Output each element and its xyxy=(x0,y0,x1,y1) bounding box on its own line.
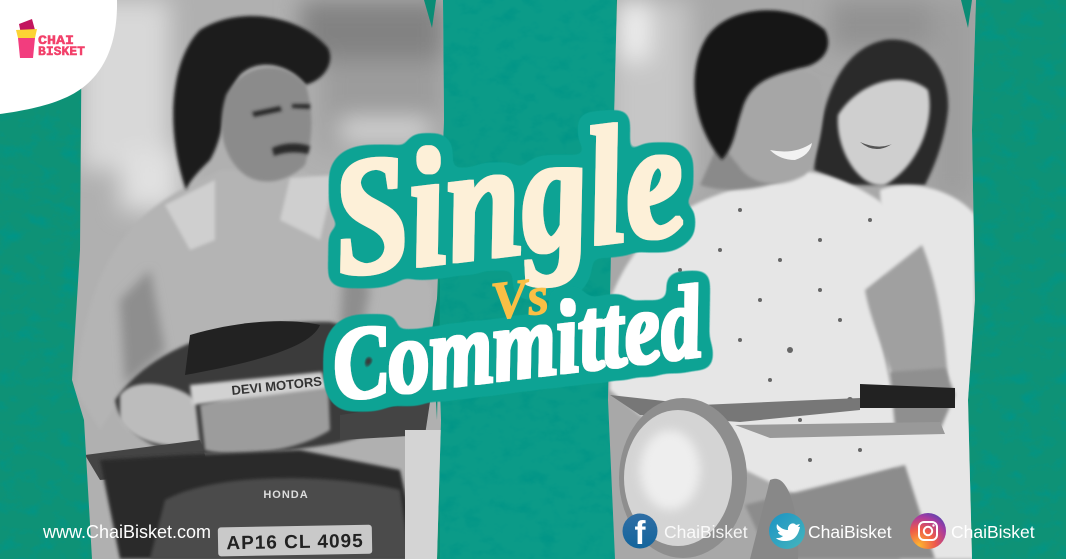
photo: single man on scooter xyxy=(70,0,445,559)
icon: twitter bird xyxy=(769,513,805,549)
title: Vs: Vs xyxy=(488,265,552,331)
footer social: instagram xyxy=(910,513,1035,549)
logo corner: white blob xyxy=(0,0,117,114)
footer social: twitter xyxy=(769,513,892,549)
man face xyxy=(221,67,312,182)
icon: instagram xyxy=(910,513,946,549)
title: Single: Single xyxy=(322,85,694,312)
photo: single man on scooter: HONDA xyxy=(263,489,309,501)
icon: facebook: f xyxy=(634,514,646,551)
woman top xyxy=(880,185,975,559)
footer social: twitter: ChaiBisket xyxy=(808,522,892,542)
number plate: AP16 CL 4095 xyxy=(226,531,364,554)
photo: committed couple on bike xyxy=(600,0,980,559)
footer website: www.ChaiBisket.com xyxy=(42,522,211,542)
scooter xyxy=(115,322,420,455)
footer social: facebook xyxy=(622,514,748,551)
woman face xyxy=(838,80,930,185)
photo: single man on scooter: DEVI MOTORS xyxy=(231,374,323,398)
footer social: instagram: ChaiBisket xyxy=(951,522,1035,542)
rough strokes at photo edges xyxy=(424,0,972,420)
lower body xyxy=(745,465,935,559)
logo wordmark: BISKET xyxy=(38,44,85,59)
logo wordmark xyxy=(38,33,85,59)
icon: cup with biscuit xyxy=(16,19,37,58)
man hair xyxy=(694,10,828,160)
logo wordmark: CHAI xyxy=(38,33,74,48)
man hair xyxy=(173,16,330,190)
footer social: facebook: ChaiBisket xyxy=(664,522,748,542)
number plate xyxy=(218,525,372,556)
bike xyxy=(860,384,955,408)
man neck and face xyxy=(700,152,778,192)
title: Committed: Committed xyxy=(326,264,709,423)
woman hair xyxy=(814,40,948,185)
logo: Chai Bisket xyxy=(16,19,85,59)
man tee xyxy=(610,172,922,497)
shirt xyxy=(74,189,186,394)
man arm xyxy=(865,245,948,385)
